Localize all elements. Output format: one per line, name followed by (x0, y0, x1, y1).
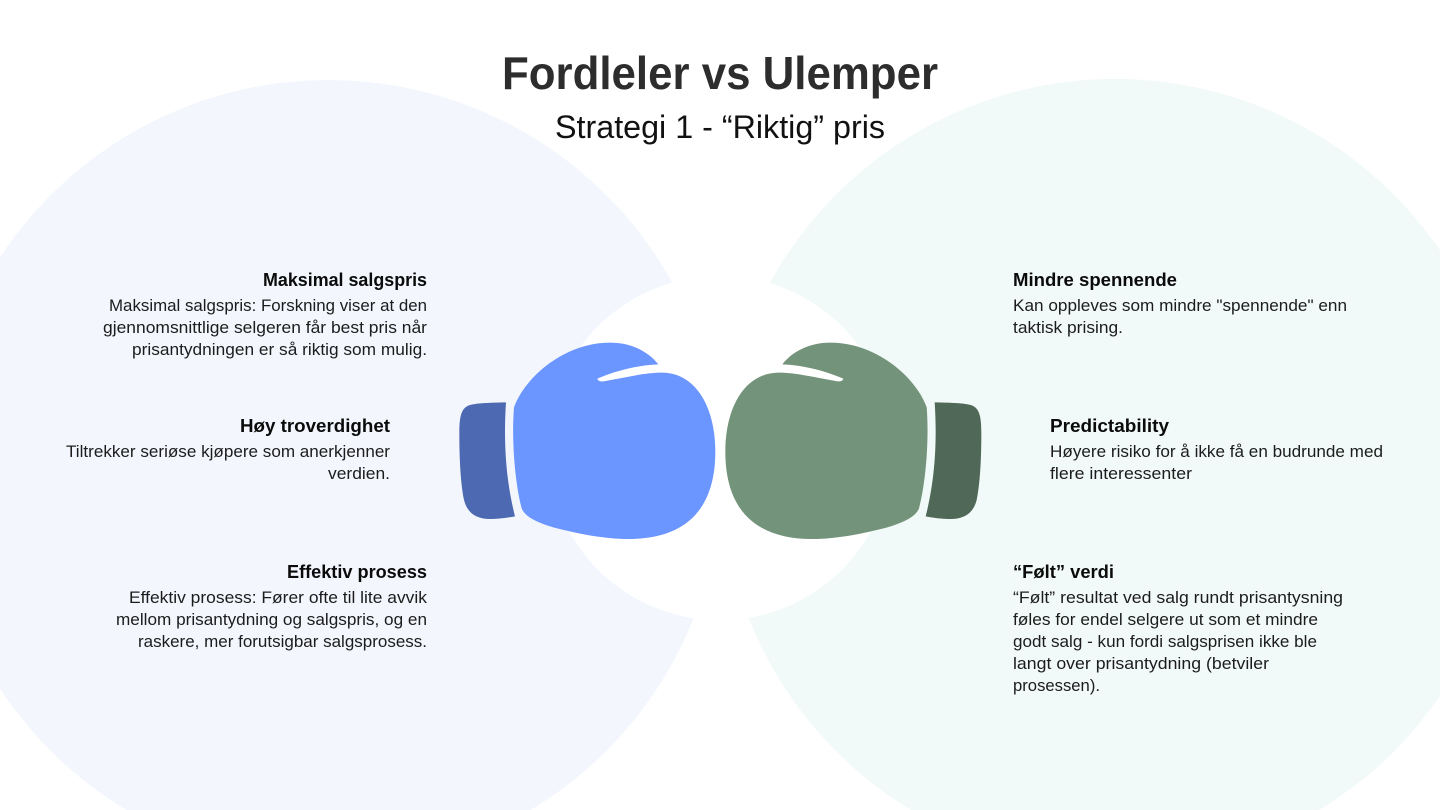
pro: Effektiv prosess: Effektiv prosess: Fører ofte til lite avvik (129, 589, 428, 607)
con: Mindre spennende: Mindre spennende (1013, 270, 1177, 290)
con: Følt verdi: “Følt” resultat ved salg rundt prisantysning (1013, 589, 1343, 607)
con: Følt verdi: føles for endel selgere ut som et mindre (1013, 611, 1318, 629)
title: Fordleler vs Ulemper (502, 47, 938, 99)
con: Følt verdi: godt salg - kun fordi salgsprisen ikke ble (1013, 633, 1317, 651)
con: Predictability (1050, 416, 1383, 483)
pro: Maksimal salgspris: Maksimal salgspris: Forskning viser at den (109, 297, 427, 315)
pro: Maksimal salgspris: gjennomsnittlige selgeren får best pris når (103, 319, 428, 337)
pro: Maksimal salgspris: Maksimal salgspris (263, 270, 427, 290)
con: Følt verdi: prosessen). (1013, 677, 1100, 695)
pro: Høy troverdighet: verdien. (328, 465, 390, 483)
con: Mindre spennende: taktisk prising. (1013, 319, 1123, 337)
white centre circle (548, 276, 892, 620)
pro: Maksimal salgspris (103, 270, 428, 359)
pro: Effektiv prosess: mellom prisantydning og salgspris, og en (116, 611, 427, 629)
background circle: cons (721, 79, 1440, 810)
pro: Høy troverdighet (66, 416, 391, 483)
con: Følt verdi (1013, 562, 1343, 695)
pro: Effektiv prosess: raskere, mer forutsigbar salgsprosess. (138, 633, 427, 651)
pro: Høy troverdighet: Tiltrekker seriøse kjøpere som anerkjenner (66, 443, 391, 461)
pro: Maksimal salgspris: prisantydningen er så riktig som mulig. (132, 341, 427, 359)
con: Følt verdi: “Følt” verdi (1013, 562, 1114, 582)
pro: Effektiv prosess: Effektiv prosess (287, 562, 427, 582)
con: Predictability: Høyere risiko for å ikke få en budrunde med (1050, 443, 1383, 461)
con: Predictability: flere interessenter (1050, 465, 1193, 483)
icon: blue boxing glove (459, 343, 715, 539)
pro: Høy troverdighet: Høy troverdighet (240, 416, 390, 436)
icon: green boxing glove (725, 343, 981, 539)
con: Mindre spennende: Kan oppleves som mindre "spennende" enn (1013, 297, 1347, 315)
con: Predictability: Predictability (1050, 416, 1169, 436)
con: Følt verdi: langt over prisantydning (betviler (1013, 655, 1270, 673)
pro: Effektiv prosess (116, 562, 428, 651)
subtitle: Strategi 1 - “Riktig” pris (555, 109, 885, 145)
background circle: pros (0, 80, 722, 810)
con: Mindre spennende (1013, 270, 1347, 337)
